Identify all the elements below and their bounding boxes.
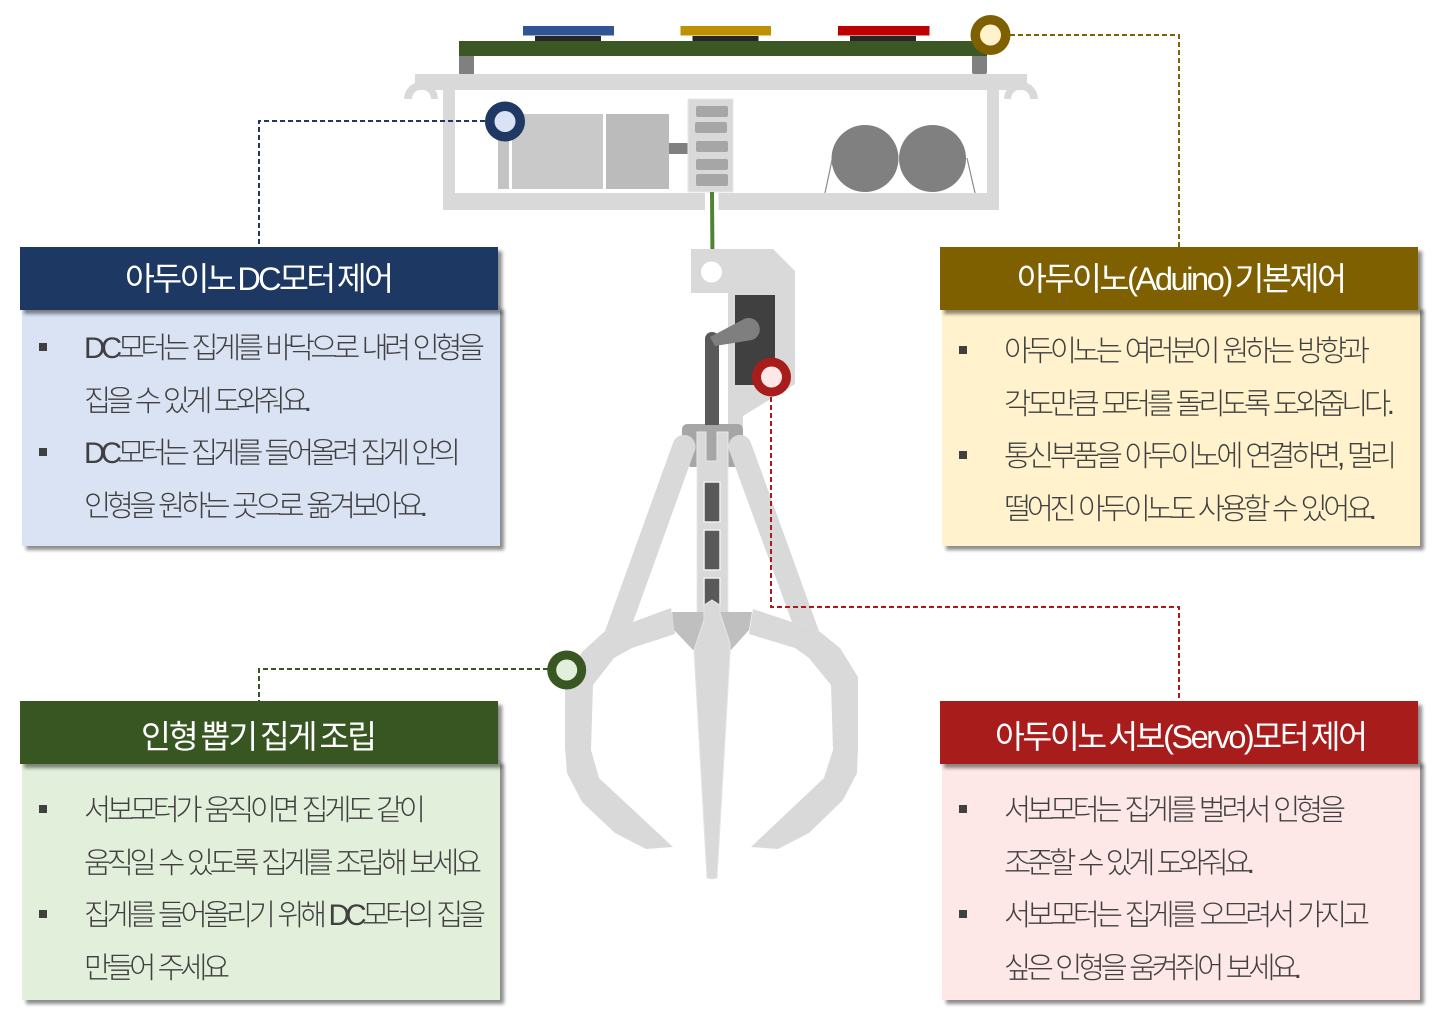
bullet text block: 조준할 수 있게 도와줘요. [1004, 847, 1255, 880]
bullet text block: 움직일 수 있도록 집게를 조립해 보세요 [84, 847, 482, 880]
marker: servo motor [752, 358, 791, 396]
bullet text block: 인형을 원하는 곳으로 옮겨보아요. [84, 490, 428, 523]
panel: claw assembly [20, 701, 500, 1000]
spools [825, 125, 975, 193]
DC motor [498, 114, 688, 189]
bullet text block: 서보모터는 집게를 오므려서 가지고 [1004, 899, 1370, 932]
circuit board with buttons [459, 26, 987, 75]
bullet text block: 서보모터가 움직이면 집게도 같이 [84, 794, 426, 827]
bullet text block [959, 335, 1397, 526]
claw joint [672, 612, 752, 650]
illustration: claw assembly [565, 249, 858, 879]
box frame [404, 74, 1038, 210]
central column [697, 432, 728, 613]
bullet text block: 집을 수 있게 도와줘요. [84, 385, 312, 418]
push rod and servo horn [705, 318, 760, 425]
panel: servo motor control [940, 701, 1420, 1000]
bullet text block: DC모터는 집게를 들어올려 집게 안의 [84, 437, 461, 470]
heading: 아두이노(Aduino) 기본제어 [1017, 261, 1347, 297]
bullet text block [959, 794, 1370, 985]
connector: claw assembly [259, 669, 548, 701]
heading: 아두이노 DC모터 제어 [125, 261, 394, 297]
right claw [728, 435, 858, 849]
panel: DC motor control [20, 247, 500, 546]
gear rack [688, 99, 733, 192]
connector: servo motor [771, 397, 1179, 701]
marker: Arduino board [970, 15, 1010, 55]
centre claw [694, 600, 730, 879]
bullet text block: 떨어진 아두이노도 사용할 수 있어요. [1004, 493, 1377, 526]
string [710, 192, 714, 262]
marker: claw [547, 650, 586, 690]
bullet text block [39, 332, 485, 523]
bullet text block: 집게를 들어올리기 위해 DC모터의 집을 [84, 899, 486, 932]
bullet text block [39, 794, 486, 985]
bullet text block: 싶은 인형을 움켜쥐어 보세요. [1004, 952, 1302, 985]
panel: Arduino basic control [940, 247, 1420, 546]
marker: DC motor [485, 102, 525, 142]
heading: 인형 뽑기 집게 조립 [141, 719, 377, 755]
bullet text block: 각도만큼 모터를 돌리도록 도와줍니다. [1004, 388, 1395, 421]
left claw [565, 435, 696, 849]
bullet text block: 서보모터는 집게를 벌려서 인형을 [1004, 794, 1346, 827]
connector: Arduino board [1010, 35, 1179, 247]
bullet text block: 아두이노는 여러분이 원하는 방향과 [1004, 335, 1370, 368]
bullet text block: 만들어 주세요 [84, 952, 230, 985]
connector: DC motor [259, 121, 485, 247]
illustration: control box with motor and circuit board [404, 26, 1038, 262]
bullet text block: 통신부품을 아두이노에 연결하면, 멀리 [1004, 440, 1397, 473]
bullet text block: DC모터는 집게를 바닥으로 내려 인형을 [84, 332, 485, 365]
servo bracket [691, 249, 795, 427]
heading: 아두이노 서보(Servo)모터 제어 [995, 719, 1368, 755]
collar [682, 424, 743, 467]
